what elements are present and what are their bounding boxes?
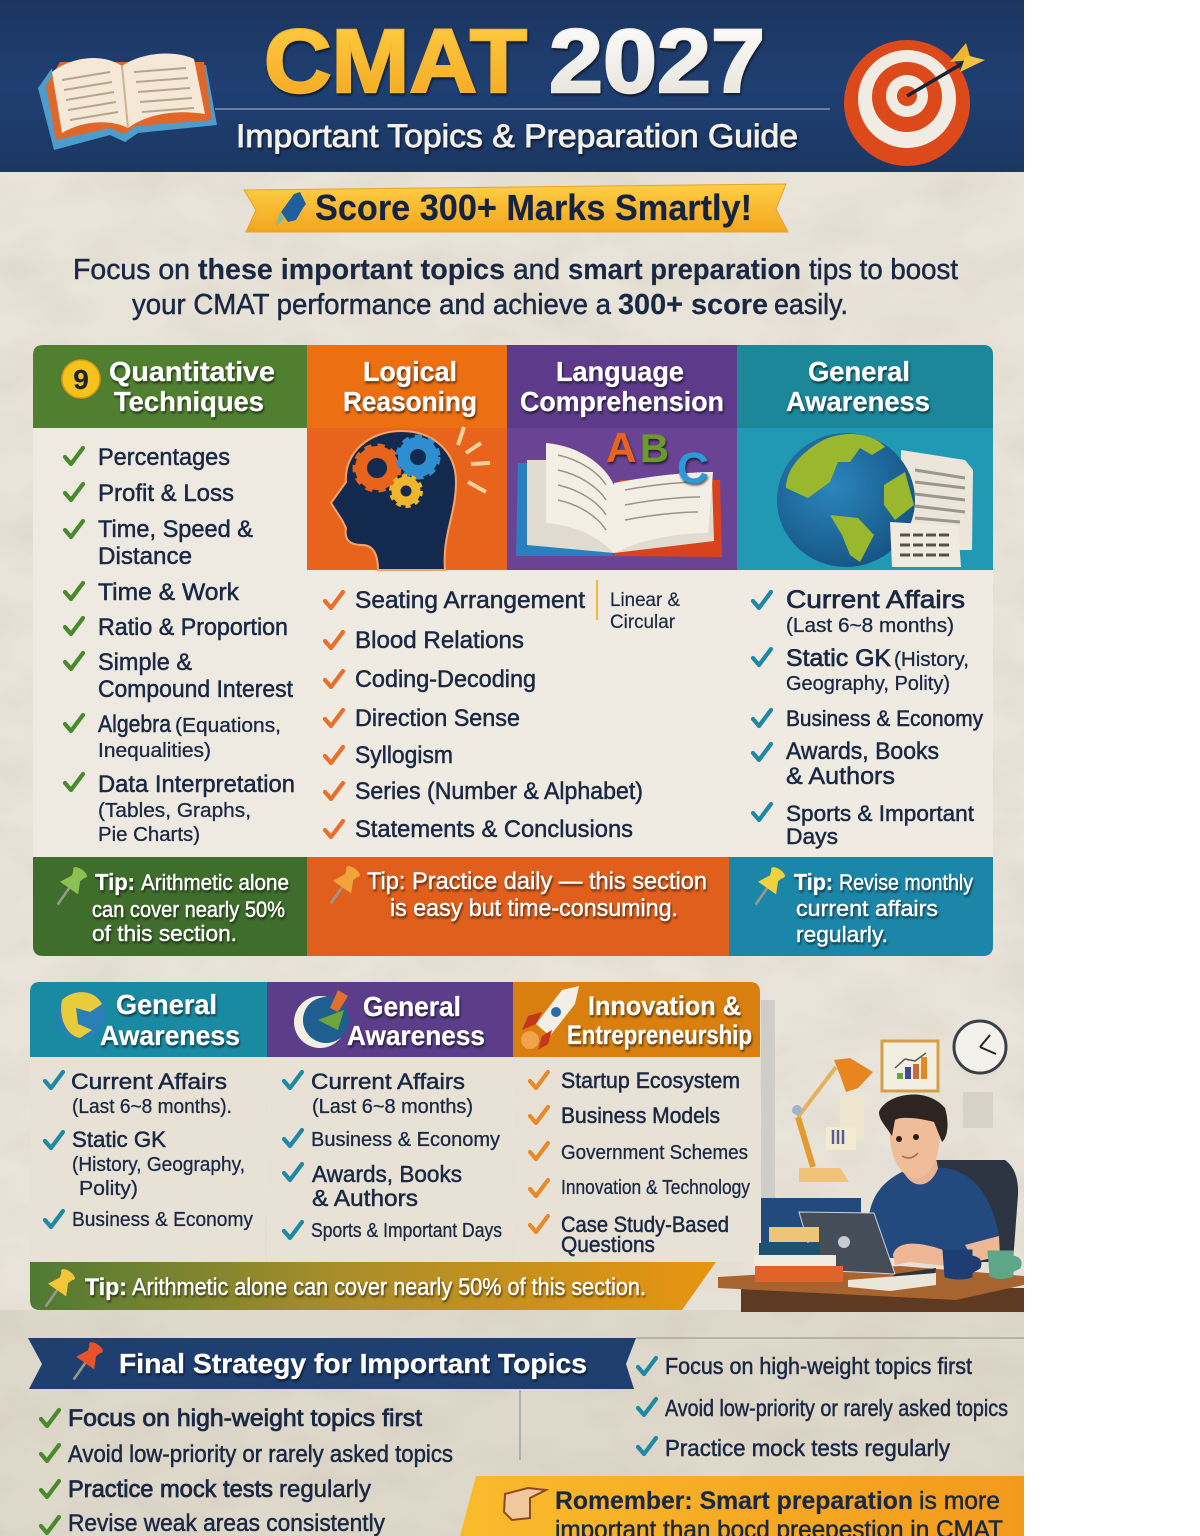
checklist: (Last 6~8 months): [312, 1096, 473, 1118]
checklist: Awards, Books: [312, 1161, 462, 1187]
green mug: [988, 1251, 1021, 1278]
callout: remember: [460, 1476, 1024, 1536]
panel: General Awareness: [737, 345, 993, 570]
checklist: Polity): [79, 1178, 138, 1200]
heading: General: [363, 991, 461, 1022]
panel: second section table: [30, 982, 760, 1313]
panel: logical reasoning topics: Circular: [610, 612, 676, 633]
checklist: (History, Geography,: [72, 1154, 245, 1176]
heading: Innovation &: [588, 991, 741, 1021]
checklist: (Equations,: [175, 715, 281, 737]
checklist: Inequalities): [98, 740, 211, 762]
tip band: [30, 1262, 716, 1313]
final strategy checklist left: Focus on high-weight topics first: [68, 1405, 422, 1432]
column: Innovation and Entrepreneurship: [513, 982, 760, 1262]
checklist: Profit & Loss: [98, 480, 234, 507]
stacked books: [754, 1227, 843, 1282]
title: [264, 12, 765, 112]
panel: logical reasoning topics: Blood Relations: [355, 627, 524, 654]
panel: logical reasoning topics: Direction Sense: [355, 705, 520, 732]
tip: revise monthly: Tip:: [794, 869, 833, 895]
heading: [100, 989, 240, 1051]
checklist: [284, 1069, 502, 1242]
intro text: 300+ score: [618, 289, 768, 321]
checklist: & Authors: [312, 1185, 418, 1211]
heading: Awareness: [100, 1020, 240, 1051]
banner: Final Strategy: Final Strategy for Important Topics: [119, 1348, 587, 1379]
final strategy checklist right: Practice mock tests regularly: [665, 1435, 950, 1461]
icon: book with ABC: C: [677, 444, 709, 493]
heading: Entrepreneurship: [567, 1020, 752, 1050]
heading: [567, 991, 752, 1050]
checklist: Static GK: [72, 1127, 166, 1152]
checklist: Business & Economy: [311, 1129, 500, 1151]
intro text: tips to boost: [809, 254, 958, 286]
tip: arithmetic: [33, 857, 307, 956]
panel: general awareness topics: Sports & Important: [786, 801, 974, 826]
heading: [786, 356, 930, 417]
icon: pointing hand: [504, 1488, 546, 1520]
heading: Logical: [363, 356, 457, 387]
callout: remember: is more: [919, 1487, 1000, 1515]
heading: Awareness: [347, 1020, 485, 1051]
heading: Awareness: [786, 386, 930, 417]
chair: [935, 1160, 1018, 1262]
laptop: [799, 1212, 936, 1279]
heading: General: [808, 356, 910, 387]
icon: rocket: [521, 986, 579, 1050]
panel: logical reasoning topics: Linear &: [610, 590, 680, 611]
tip band: Arithmetic alone can cover nearly 50% of this section.: [132, 1274, 646, 1301]
intro text: [73, 254, 958, 321]
checklist: Case Study-Based: [561, 1212, 729, 1237]
checklist: Business & Economy: [72, 1209, 253, 1231]
column: General Awareness teal: [30, 982, 267, 1262]
sticky note: [826, 1095, 864, 1150]
icon: framed chart: [882, 1041, 938, 1091]
heading: [343, 356, 477, 417]
checklist: Compound Interest: [98, 676, 293, 703]
panel: logical reasoning topics: Statements & Conclusions: [355, 816, 633, 843]
icon: number nine: 9: [73, 364, 89, 395]
panel: general awareness topics: Business & Economy: [786, 706, 983, 731]
heading: General: [116, 989, 217, 1020]
tip: revise monthly: Revise monthly: [839, 870, 973, 895]
checklist: Ratio & Proportion: [98, 614, 288, 641]
faint wall note: [963, 1092, 993, 1128]
tip: arithmetic: Arithmetic alone: [141, 870, 289, 895]
banner: Final Strategy: [28, 1338, 1024, 1389]
icon: clock: [954, 1021, 1006, 1073]
tip: practice daily: Tip: Practice daily — this section: [367, 868, 707, 895]
panel: four section table: [33, 345, 993, 956]
title: 2027: [549, 12, 765, 112]
panel: general awareness topics: [735, 572, 993, 857]
heading: Reasoning: [343, 386, 477, 417]
blue mug: [943, 1250, 981, 1279]
intro text: Focus on: [73, 254, 190, 286]
heading: [520, 356, 724, 417]
icon: number nine: [62, 360, 100, 398]
person: [869, 1095, 1000, 1266]
checklist: [45, 1069, 253, 1231]
intro text: and: [513, 254, 560, 286]
icon: globe and newspapers: [777, 433, 973, 567]
final strategy checklist left: regularly: [279, 1476, 371, 1503]
intro text: easily.: [774, 289, 848, 321]
tip band: Tip:: [85, 1274, 127, 1301]
intro text: your CMAT performance and achieve a: [132, 289, 612, 321]
checklist: (Tables, Graphs,: [98, 800, 251, 822]
panel: logical reasoning topics: Coding-Decoding: [355, 666, 536, 693]
tip: arithmetic: Tip:: [95, 869, 135, 895]
tip: revise monthly: current affairs: [796, 896, 938, 921]
final strategy checklist right: [638, 1353, 1008, 1461]
icon: book with ABC: A: [606, 424, 636, 471]
icon: blue pin: [276, 192, 306, 226]
icon: globe with crescent: [294, 990, 349, 1048]
checklist: Current Affairs: [71, 1069, 227, 1094]
title: CMAT: [264, 12, 527, 112]
panel: Logical Reasoning: [307, 345, 507, 570]
checklist: Algebra: [98, 711, 172, 738]
icon: desk lamp: [792, 1058, 873, 1182]
panel: Quantitative Techniques: [33, 345, 307, 956]
checklist: Sports & Important Days: [311, 1220, 502, 1242]
panel: general awareness topics: Geography, Polity): [786, 673, 950, 695]
tip: revise monthly: [729, 857, 993, 956]
checklist: Time, Speed &: [98, 516, 253, 543]
heading: Language: [556, 356, 684, 387]
desk: [718, 1266, 1024, 1312]
heading: Quantitative: [109, 356, 275, 387]
checklist: [65, 444, 295, 846]
icon: book with ABC: [516, 424, 722, 557]
icon: open book: [38, 54, 217, 150]
callout: remember: Romember: Smart preparation: [555, 1487, 913, 1515]
icon: book with ABC: B: [640, 427, 669, 471]
checklist: (Last 6~8 months).: [72, 1096, 232, 1118]
final strategy checklist left: [41, 1405, 453, 1536]
white right margin: [1024, 0, 1200, 1536]
tip: arithmetic: of this section.: [92, 921, 237, 946]
heading: Comprehension: [520, 386, 724, 417]
open book on desk: [848, 1273, 936, 1291]
heading: [347, 991, 485, 1051]
checklist: Business Models: [561, 1103, 720, 1128]
panel: general awareness topics: (History,: [894, 649, 969, 671]
checklist: Time & Work: [98, 579, 240, 606]
intro text: these important topics: [198, 254, 505, 286]
heading: [109, 356, 275, 417]
tip: arithmetic: can cover nearly 50%: [92, 897, 285, 922]
panel: general awareness topics: & Authors: [786, 763, 895, 790]
tip: practice daily: is easy but time-consuming.: [390, 895, 678, 922]
checklist: Distance: [98, 543, 192, 570]
checklist: Startup Ecosystem: [561, 1068, 740, 1093]
checklist: Pie Charts): [98, 824, 200, 846]
panel: logical reasoning topics: Series (Number & Alphabet): [355, 778, 643, 805]
checklist: Questions: [561, 1232, 655, 1257]
checklist: [530, 1068, 750, 1257]
panel: general awareness topics: Days: [786, 824, 838, 849]
tip: practice daily: [307, 857, 729, 956]
subtitle: Important Topics & Preparation Guide: [236, 118, 798, 154]
checklist: Innovation & Technology: [561, 1177, 750, 1199]
final strategy checklist right: Focus on high-weight topics first: [665, 1353, 973, 1379]
final strategy checklist left: Avoid low-priority or rarely asked topics: [68, 1441, 453, 1468]
panel: Language Comprehension: [507, 345, 737, 570]
checklist: Percentages: [98, 444, 230, 471]
checklist: Government Schemes: [561, 1142, 748, 1164]
final strategy checklist right: Avoid low-priority or rarely asked topics: [665, 1395, 1008, 1421]
panel: general awareness topics: (Last 6~8 months): [786, 615, 954, 637]
panel: general awareness topics: Current Affairs: [786, 586, 965, 614]
checklist: Data Interpretation: [98, 771, 295, 798]
tip: revise monthly: regularly.: [796, 922, 888, 947]
header band: [0, 0, 1024, 172]
icon: small globe: [57, 991, 105, 1039]
intro text: smart preparation: [568, 254, 801, 286]
column: General Awareness purple: [267, 982, 513, 1262]
checklist: Simple &: [98, 649, 192, 676]
checklist: Current Affairs: [311, 1069, 465, 1094]
panel: logical reasoning topics: Syllogism: [355, 742, 453, 769]
banner: Score 300+ Marks Smartly: Score 300+ Marks Smartly!: [315, 187, 752, 228]
panel: general awareness topics: Awards, Books: [786, 738, 939, 765]
icon: target with arrow: [844, 40, 985, 166]
monitor back: [761, 1198, 861, 1253]
panel: general awareness topics: Static GK: [786, 645, 891, 672]
panel: logical reasoning topics: [307, 572, 733, 857]
panel: logical reasoning topics: Seating Arrangement: [355, 587, 585, 614]
final strategy checklist left: Practice mock tests: [68, 1476, 273, 1503]
illustration: student studying at desk: [718, 1000, 1024, 1312]
heading: Techniques: [114, 386, 264, 417]
icon: head with gears: [331, 427, 490, 570]
